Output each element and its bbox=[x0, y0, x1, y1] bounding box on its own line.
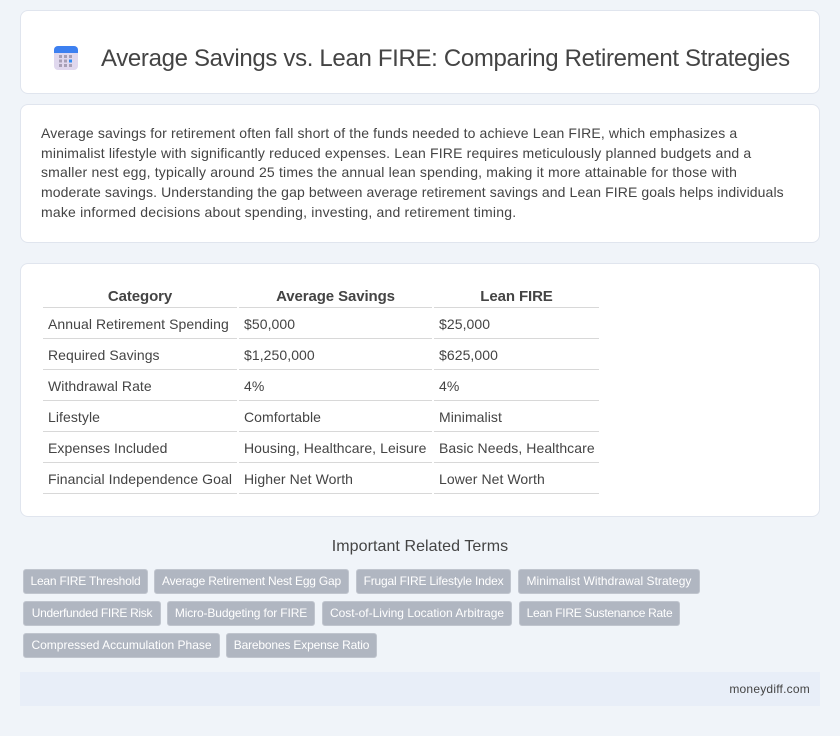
footer source text: moneydiff.com bbox=[729, 682, 810, 696]
comparison table: Minimalist bbox=[439, 409, 502, 425]
related terms tags: Minimalist Withdrawal Strategy bbox=[527, 574, 691, 588]
related terms tags: Lean FIRE Threshold bbox=[30, 574, 141, 588]
comparison table: Required Savings bbox=[48, 347, 160, 363]
comparison table: $25,000 bbox=[439, 316, 490, 332]
intro paragraph: moderate savings. Understanding the gap between average retirement savings and Lean FIRE goals helps individuals bbox=[41, 184, 784, 200]
header card bbox=[20, 10, 820, 94]
table header: Average Savings bbox=[276, 288, 395, 305]
comparison table: Comfortable bbox=[244, 409, 321, 425]
related terms tags: Frugal FIRE Lifestyle Index bbox=[364, 574, 503, 588]
comparison table: $50,000 bbox=[244, 316, 295, 332]
comparison table panel bbox=[20, 263, 820, 517]
comparison table: Higher Net Worth bbox=[244, 471, 353, 487]
intro paragraph bbox=[41, 125, 784, 220]
table header: Lean FIRE bbox=[480, 288, 553, 305]
intro paragraph: make informed decisions about spending, investing, and retirement timing. bbox=[41, 204, 516, 220]
comparison table: 4% bbox=[439, 378, 459, 394]
intro text panel bbox=[20, 104, 820, 243]
title: Average Savings vs. Lean FIRE: Comparing Retirement Strategies bbox=[101, 45, 790, 72]
comparison table: Lower Net Worth bbox=[439, 471, 545, 487]
comparison table: Financial Independence Goal bbox=[48, 471, 232, 487]
comparison table: Housing, Healthcare, Leisure bbox=[244, 440, 427, 456]
comparison table: $625,000 bbox=[439, 347, 498, 363]
comparison table: 4% bbox=[244, 378, 264, 394]
intro paragraph: minimalist lifestyle with significantly reduced expenses. Lean FIRE requires meticulously planned budgets and a bbox=[41, 145, 751, 161]
footer bar bbox=[20, 672, 820, 706]
comparison table: Basic Needs, Healthcare bbox=[439, 440, 595, 456]
comparison table bbox=[43, 288, 599, 494]
intro paragraph: smaller nest egg, typically around 25 times the annual lean spending, making it more attainable for those with bbox=[41, 164, 737, 180]
related terms tags: Average Retirement Nest Egg Gap bbox=[162, 574, 341, 588]
related terms tags: Barebones Expense Ratio bbox=[234, 638, 369, 652]
icon: calendar bbox=[54, 46, 78, 70]
comparison table: Expenses Included bbox=[48, 440, 168, 456]
comparison table: Withdrawal Rate bbox=[48, 378, 152, 394]
comparison table: Annual Retirement Spending bbox=[48, 316, 229, 332]
comparison table: Lifestyle bbox=[48, 409, 100, 425]
related terms tags: Cost-of-Living Location Arbitrage bbox=[330, 606, 504, 620]
related terms tags: Compressed Accumulation Phase bbox=[31, 638, 212, 652]
related terms tags: Lean FIRE Sustenance Rate bbox=[527, 606, 672, 620]
comparison table: $1,250,000 bbox=[244, 347, 315, 363]
table header: Category bbox=[108, 288, 172, 305]
table header bbox=[108, 288, 553, 305]
related terms tags: Underfunded FIRE Risk bbox=[32, 606, 152, 620]
related terms tags: Micro-Budgeting for FIRE bbox=[175, 606, 307, 620]
intro paragraph: Average savings for retirement often fall short of the funds needed to achieve Lean FIRE, which emphasizes a bbox=[41, 125, 737, 141]
related terms tags bbox=[23, 569, 700, 658]
related terms heading: Important Related Terms bbox=[332, 538, 508, 555]
